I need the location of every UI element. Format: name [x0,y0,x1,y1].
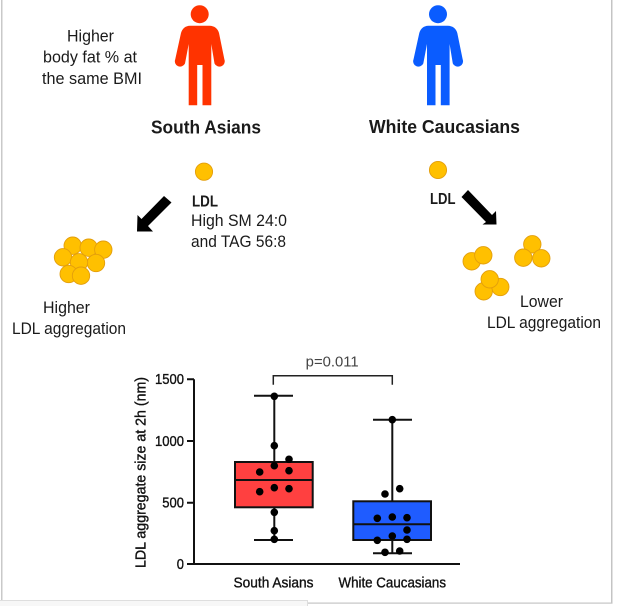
text: higher body fat note [42,28,142,88]
icon: blue person, White Caucasians [413,5,463,105]
y axis: 500 [162,496,184,512]
arrow: down-left to South Asian aggregate [137,196,172,232]
data points: South Asians [256,392,293,543]
arrow: down-right to White Caucasian aggregates [462,190,496,224]
text: lower LDL aggregation: LDL aggregation [487,314,601,332]
y axis [134,372,460,573]
icon: single LDL particle, White Caucasians [429,161,447,179]
box: White Caucasians [353,420,431,553]
icon: single LDL particle, South Asians [195,163,213,180]
x axis labels [234,576,446,592]
text: LDL composition, South Asians: LDL [192,194,218,210]
icon: red person, South Asians [175,5,225,105]
box plot chart [134,355,460,592]
y axis: 0 [177,557,184,573]
text: LDL, White Caucasians: LDL [430,191,456,208]
x axis labels: White Caucasians [338,576,446,592]
text: LDL composition, South Asians [191,194,287,251]
significance bracket: p=0.011 [306,355,359,371]
y axis: 1500 [155,372,184,388]
x axis labels: South Asians [234,576,314,592]
text: higher body fat note: body fat % at [43,48,137,66]
significance bracket [273,355,392,385]
data points: White Caucasians [374,416,411,556]
icon: small LDL aggregates [463,236,550,300]
y axis: LDL aggregate size at 2h (nm) [134,377,150,568]
text: LDL composition, South Asians: High SM 24:0 [191,212,287,230]
text: higher LDL aggregation: LDL aggregation [12,320,126,338]
heading: White Caucasians: White Caucasians [369,116,520,137]
heading: South Asians: South Asians [151,116,261,138]
text: higher body fat note: Higher [67,28,114,46]
box: South Asians [235,396,313,540]
text: higher LDL aggregation: Higher [43,299,90,317]
text: higher body fat note: the same BMI [42,70,142,88]
text: lower LDL aggregation [487,293,601,332]
text: lower LDL aggregation: Lower [520,293,563,311]
text: higher LDL aggregation [12,299,126,338]
icon: large LDL aggregate [54,237,112,284]
text: LDL composition, South Asians: and TAG 56:8 [191,233,286,251]
y axis: 1000 [155,434,184,450]
